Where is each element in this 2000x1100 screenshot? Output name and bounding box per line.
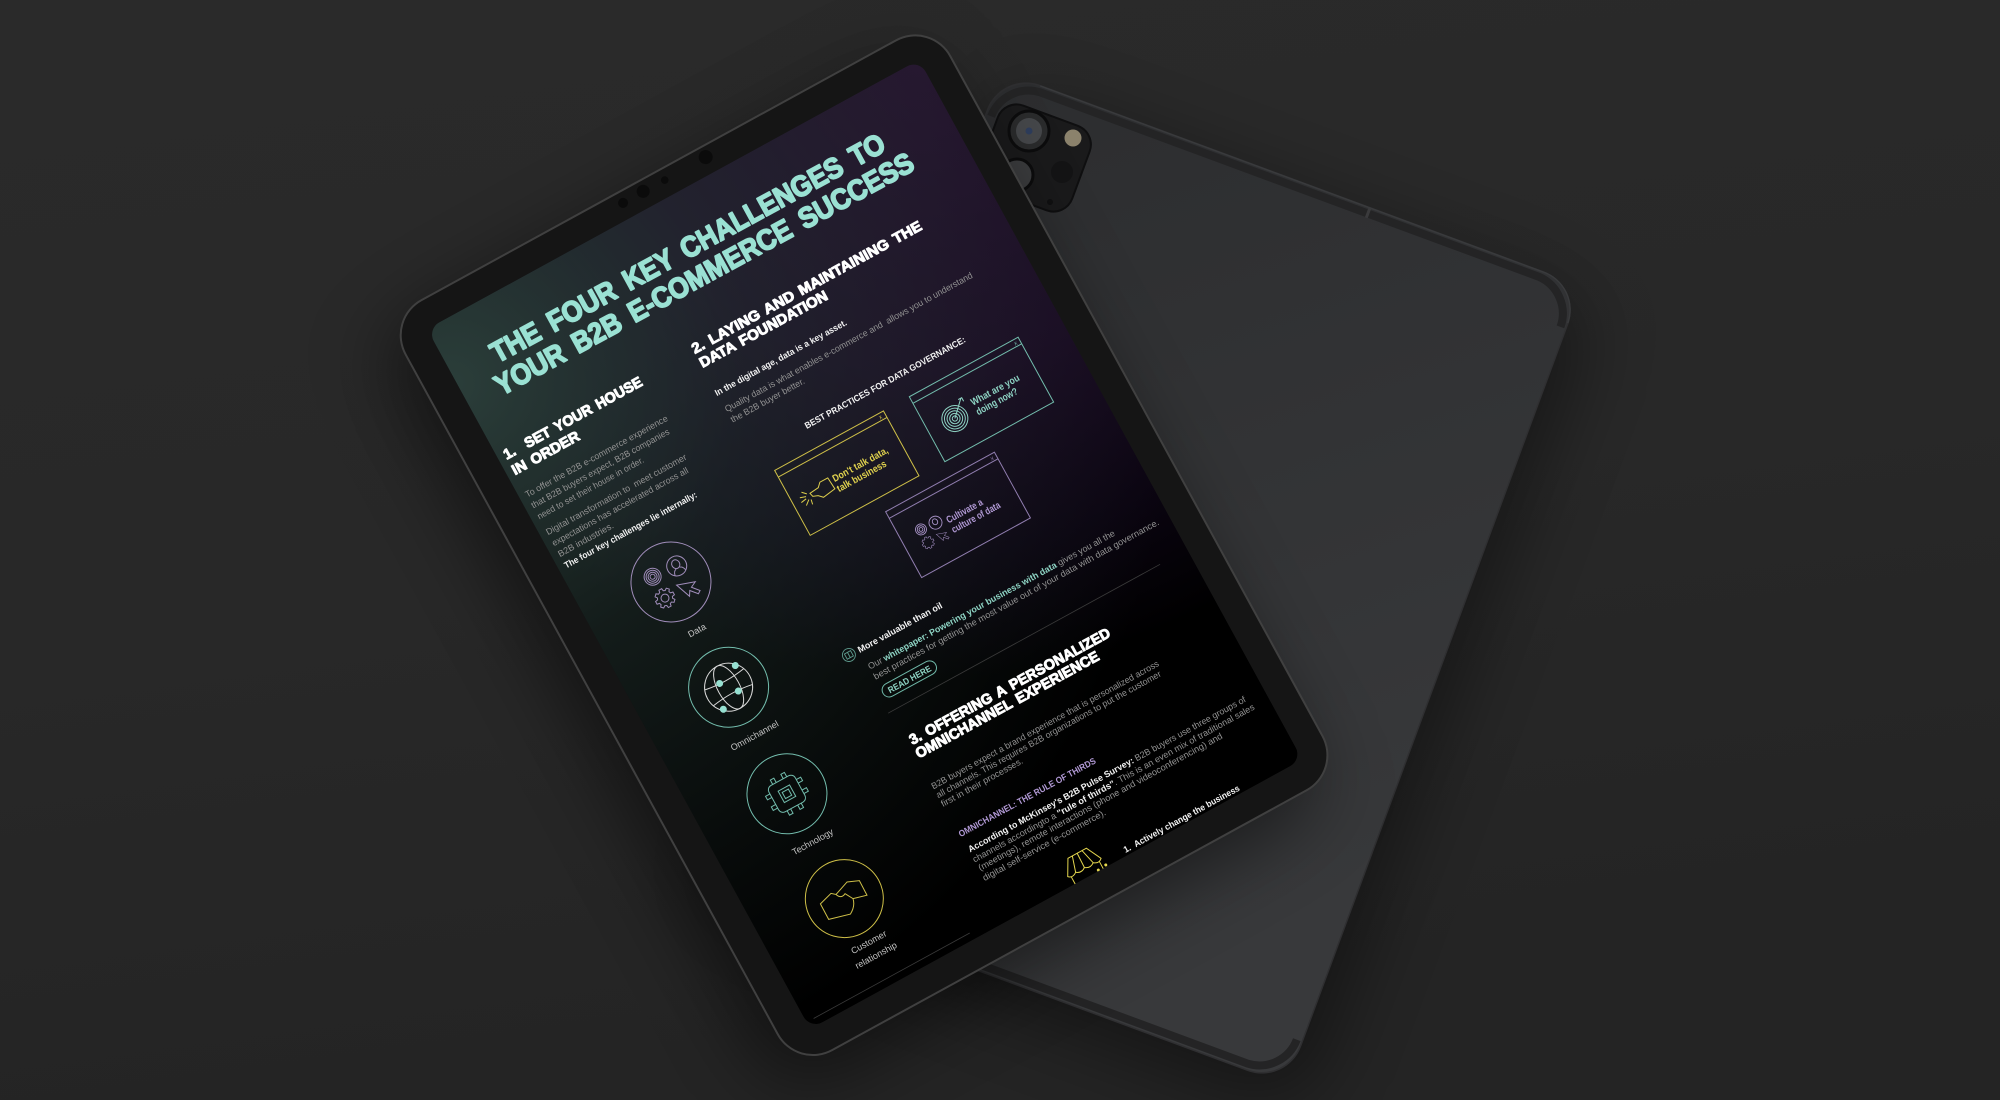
- callout: whitepaper: best practices for getting the most value out of your data with data governance.: [872, 517, 1161, 681]
- text block: rule of thirds: digital self-service (e-commerce).: [981, 807, 1108, 883]
- window: cultivate a culture of data: culture of data: [950, 500, 1003, 536]
- text block: intro: The four key challenges lie internally:: [562, 490, 699, 570]
- text block: intro: Quality data is what enables e-commerce and allows you to understand: [723, 270, 974, 414]
- window: don't talk data: talk business: [835, 459, 889, 495]
- label: customer relationship: [852, 931, 897, 969]
- callout: whitepaper: Our whitepaper: Powering your business with data gives you all the: [866, 528, 1117, 671]
- text block: rule of thirds: channels accordingto a "rule of thirds". This is an even mix of traditional sales: [971, 702, 1257, 864]
- window: cultivate a culture of data: Cultivate a: [945, 497, 985, 526]
- label: technology: Technology: [790, 826, 835, 857]
- icon: technology: [746, 753, 828, 834]
- window: what are you doing now: doing now?: [974, 386, 1020, 418]
- heading: section 1: 1. SET YOUR HOUSE: [501, 374, 646, 463]
- icon: omnichannel: [688, 646, 770, 728]
- window: don't talk data: Don't talk data,: [831, 445, 891, 485]
- label: data: Data: [686, 621, 708, 639]
- text block: intro: B2B buyers expect a brand experience that is personalized across: [930, 658, 1161, 791]
- text block: intro: Digital transformation to meet customer: [544, 452, 688, 537]
- text block: intro: the B2B buyer better.: [729, 376, 806, 425]
- panel: back tablet: [705, 70, 1583, 1086]
- text: point 1: 1. Actively change the business: [1122, 783, 1241, 855]
- text block: intro: that B2B buyers expect, B2B companies: [529, 426, 672, 510]
- window: cultivate a culture of data: [886, 452, 1030, 578]
- subheading: best practices: BEST PRACTICES FOR DATA GOVERNANCE:: [803, 335, 967, 431]
- window: cultivate a culture of data: x: [990, 456, 995, 462]
- icon: front cameras: [615, 148, 715, 211]
- label: customer relationship: relationship: [853, 940, 899, 971]
- panel: section 2: [691, 220, 1160, 714]
- back tablet shadow: [716, 96, 1594, 1100]
- text block: intro: first in their processes.: [939, 756, 1025, 809]
- callout: whitepaper: More valuable than oil: [856, 600, 944, 655]
- window: what are you doing now: [909, 337, 1054, 462]
- icon: target: [941, 397, 968, 432]
- heading: section 1: IN ORDER: [509, 428, 583, 479]
- title: THE FOUR KEY CHALLENGES TO: [485, 128, 891, 370]
- icon: book: [842, 648, 856, 662]
- front tablet shadow: [375, 48, 1329, 1096]
- window: don't talk data: [775, 411, 919, 535]
- text block: intro: need to set their house in order.: [535, 455, 646, 521]
- text block: rule of thirds: (meetings), remote interactions (phone and videoconferencing) and: [976, 731, 1224, 873]
- window: what are you doing now: x: [1013, 341, 1019, 347]
- icon: pointing hand: [800, 477, 836, 506]
- text block: intro: In the digital age, data is a key asset.: [713, 318, 849, 398]
- text block: intro: B2B industries.: [556, 520, 615, 559]
- heading: section 2: DATA FOUNDATION: [697, 288, 831, 371]
- window: don't talk data: x: [878, 415, 884, 421]
- icon: rear camera module: [973, 99, 1097, 217]
- icon: culture of data: [915, 516, 950, 550]
- panel: screen: [423, 60, 1303, 1033]
- heading: section 2: 2. LAYING AND MAINTAINING THE: [689, 218, 925, 357]
- text block: rule of thirds: According to McKinsey's B2B Pulse Survey: B2B buyers use three groups of: [966, 694, 1248, 854]
- text block: intro: all channels. This requires B2B organizations to put the customer: [934, 669, 1163, 800]
- text block: intro: expectations has accelerated across all: [550, 465, 690, 548]
- text block: intro: To offer the B2B e-commerce experience: [523, 413, 669, 499]
- icon: data: [630, 542, 712, 622]
- label: customer relationship: Customer: [849, 928, 888, 956]
- text block: intro: [524, 416, 697, 568]
- panel: section 1: [501, 363, 970, 1019]
- title: YOUR B2B E-COMMERCE SUCCESS: [489, 147, 920, 402]
- icon: storefront: [1067, 848, 1108, 884]
- heading: section 3: OMNICHANNEL EXPERIENCE: [913, 649, 1103, 762]
- panel: front tablet: [386, 21, 1342, 1069]
- subheading: rule of thirds: OMNICHANNEL: THE RULE OF THIRDS: [957, 756, 1098, 839]
- icon: customer relationship: [804, 859, 884, 938]
- button: read here: READ HERE: [886, 663, 933, 695]
- bezel: [386, 21, 1342, 1069]
- heading: section 3: 3. OFFERING A PERSONALIZED: [907, 625, 1113, 749]
- window: what are you doing now: What are you: [969, 373, 1022, 408]
- label: omnichannel: Omnichannel: [729, 719, 780, 753]
- panel: section 3: [908, 628, 1254, 884]
